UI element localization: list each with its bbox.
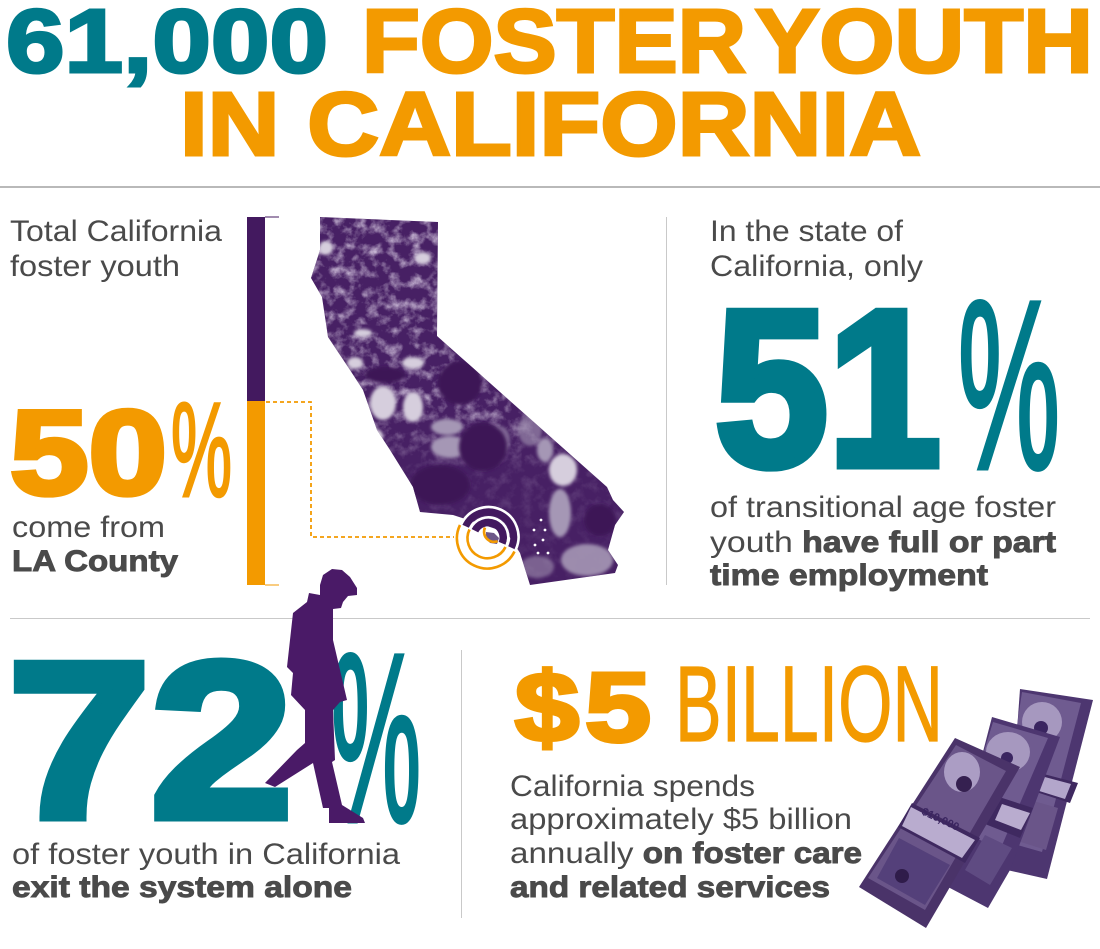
text: exit the system alone: of foster youth in California (12, 838, 400, 871)
statistic: 51 percent: 51 (715, 265, 941, 513)
statistic: 5 billion: BILLION (675, 643, 943, 764)
statistic: 50 percent (10, 376, 232, 525)
statistic: 50 percent: 50 (10, 386, 167, 520)
text: in the state of California: California, only (710, 250, 923, 283)
text: employment: time employment (710, 559, 988, 592)
image: money stacks: $10,000 (920, 806, 961, 834)
text: California spends (510, 770, 862, 904)
statistic: 72 percent: 72 (8, 617, 293, 865)
connector: dashed line to LA (266, 402, 454, 537)
text: employment: youth have full or part (710, 526, 1056, 559)
text: % (331, 604, 421, 872)
statistic: 5 billion (515, 643, 943, 764)
statistic: 72 percent (8, 604, 421, 872)
text: exit the system alone: exit the system alone (12, 871, 352, 904)
statistic: 51 percent (715, 251, 1060, 519)
text: employment (710, 491, 1056, 592)
text: come from LA County (12, 511, 178, 578)
title: IN CALIFORNIA (180, 75, 921, 175)
text: exit the system alone (12, 838, 400, 904)
text: total California foster youth (10, 215, 222, 283)
icon: LA target rings (457, 507, 519, 569)
text: California spends: California spends (510, 770, 755, 803)
icon: walking person (265, 569, 365, 823)
statistic: 50 percent: % (171, 376, 232, 525)
bar: share of foster youth (247, 217, 279, 585)
text: employment: of transitional age foster (710, 491, 1056, 524)
text: California spends: approximately $5 billion (510, 803, 852, 836)
text: California spends: and related services (510, 871, 830, 904)
title (6, 0, 1093, 175)
image: money stacks (859, 689, 1093, 928)
text: total California foster youth: Total California (10, 215, 222, 248)
text: total California foster youth: foster youth (10, 250, 180, 283)
text: California spends: annually on foster care (510, 837, 862, 870)
text: in the state of California: In the state of (710, 215, 904, 248)
text: in the state of California (710, 215, 923, 283)
statistic: 5 billion: $ (515, 652, 579, 762)
statistic: 5 billion: 5 (585, 652, 651, 762)
text: come from LA County: come from (12, 511, 165, 544)
map: California crowd (300, 210, 630, 590)
text: come from LA County: LA County (12, 545, 178, 578)
